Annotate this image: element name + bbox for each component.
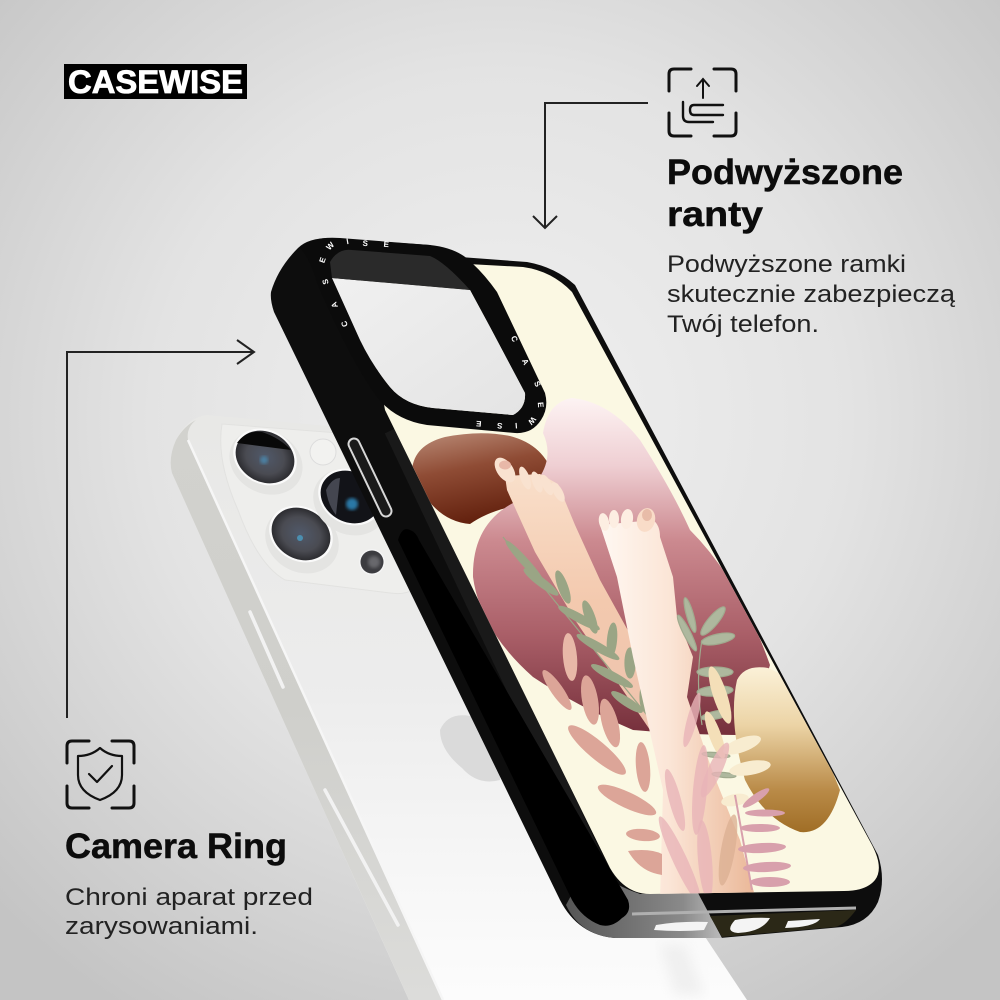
pink blob (473, 398, 770, 735)
text block: camera ring (65, 884, 313, 940)
heading: raised edges: ranty (667, 195, 764, 234)
gold blob (734, 667, 840, 832)
ring lettering: E (318, 255, 328, 264)
bottom port right (785, 919, 820, 928)
green fern right (675, 597, 736, 779)
camera plateau (221, 424, 412, 594)
case frame (271, 238, 882, 938)
left foot (490, 454, 650, 730)
transparent lower-left section (566, 860, 722, 938)
phone body (171, 415, 747, 1000)
lens right (301, 456, 399, 548)
icon: raised edges (669, 69, 736, 136)
cream leaves (701, 664, 772, 808)
text block: raised edges: skutecznie zabezpieczą (667, 281, 956, 308)
olive lower strip (710, 910, 856, 937)
ring lettering: E (475, 419, 482, 428)
right leg (597, 506, 756, 900)
side button on case (354, 444, 386, 511)
ring lettering: S (532, 380, 543, 389)
flash (310, 439, 336, 465)
heading: raised edges (667, 153, 903, 234)
ring lettering: A (520, 357, 531, 367)
ring lettering (318, 237, 545, 430)
back shadow streak (660, 945, 705, 995)
ring lettering: W (526, 415, 538, 427)
phone side band (171, 420, 443, 1000)
case bottom lip (632, 908, 856, 914)
white phone behind the case (171, 415, 747, 1000)
brand logo: CASEWISE (68, 64, 243, 100)
microphone dot (359, 549, 385, 575)
ring body (300, 238, 546, 433)
pink fern right (735, 786, 791, 890)
ring lettering: I (346, 237, 349, 246)
green fern left (502, 536, 646, 715)
ring lettering: W (324, 240, 336, 252)
heading: camera ring: Camera Ring (65, 827, 287, 866)
brown blob (412, 433, 554, 524)
cream screen area (360, 264, 879, 894)
text block: camera ring: Chroni aparat przed (65, 884, 313, 911)
text block: raised edges: Podwyższone ramki (667, 251, 906, 278)
heading: raised edges: Podwyższone (667, 153, 903, 192)
lens bottom (253, 494, 351, 586)
visible hole (332, 278, 525, 415)
bottom port left (654, 922, 708, 931)
band lip highlight (188, 440, 443, 1000)
arrow: top, pointing to raised edges (533, 103, 648, 228)
ring inner wall (330, 250, 470, 290)
arrow: left, pointing to camera ring (67, 340, 254, 718)
frame inner ridge (392, 430, 598, 865)
frame slit (398, 529, 629, 926)
phone case (271, 237, 882, 938)
apple logo (440, 715, 500, 782)
text block: raised edges (667, 251, 956, 338)
ring lettering: E (383, 240, 390, 249)
ring lettering: S (320, 277, 331, 285)
lens top (218, 417, 314, 507)
text block: raised edges: Twój telefon. (667, 311, 819, 338)
icon: shield with check (67, 741, 134, 808)
artwork (412, 398, 840, 906)
side buttons (250, 612, 398, 925)
ring lettering: A (329, 300, 340, 309)
ring lettering: C (509, 334, 520, 344)
ring lettering: S (496, 421, 503, 430)
pink fern left (538, 632, 662, 875)
ring lettering: S (362, 239, 369, 248)
ring lettering: I (515, 421, 518, 430)
pink fronds over leg (658, 693, 738, 894)
camera ring (300, 237, 546, 433)
ring lettering: E (536, 402, 545, 408)
text block: camera ring: zarysowaniami. (65, 913, 258, 940)
bottom port middle (730, 918, 770, 933)
ring lettering: C (339, 319, 350, 328)
